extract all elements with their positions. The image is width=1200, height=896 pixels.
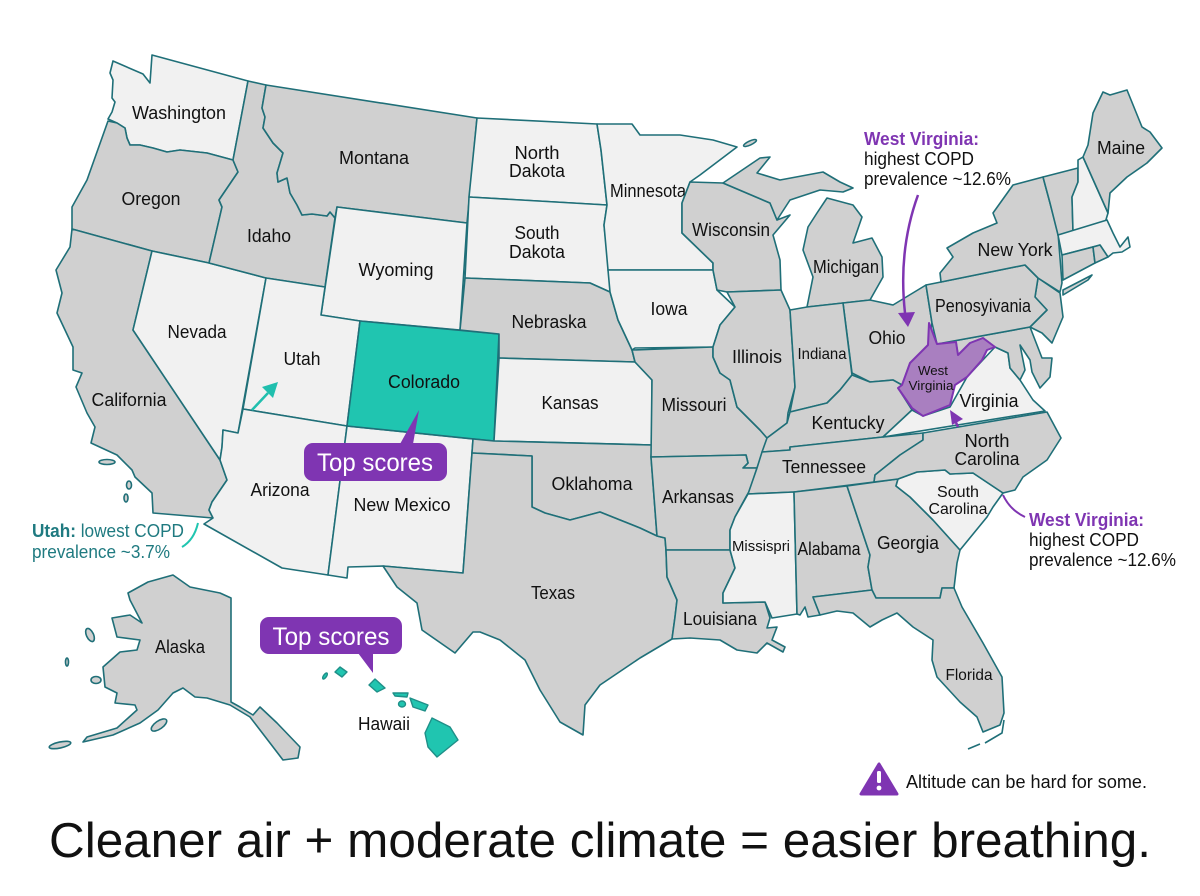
state: Iowa: Iowa (650, 299, 688, 319)
state: Virginia: Virginia (960, 391, 1019, 411)
state: Alaska (49, 575, 300, 760)
state: Tennessee: Tennessee (782, 457, 866, 477)
state: Wisconsin (682, 182, 790, 292)
state: Florida: Florida (946, 667, 993, 684)
state: Arizona: Arizona (250, 480, 310, 500)
state: Michigan: Michigan (813, 257, 879, 277)
state: Utah: Utah (284, 349, 320, 369)
state: Maine (1083, 90, 1162, 213)
state: Oregon: Oregon (122, 189, 180, 209)
state: Florida (813, 588, 1004, 732)
state: Tennessee (748, 433, 923, 494)
state: Kansas: Kansas (542, 393, 598, 413)
state: South Carolina (896, 470, 1003, 550)
state: Utah (243, 278, 360, 426)
state: Mississippi: Missispri (732, 538, 790, 555)
state: New Jersey (1030, 278, 1063, 343)
state: West Virginia: West (918, 363, 948, 378)
callout: Top scores over Hawaii (260, 617, 402, 673)
state: New Mexico (328, 426, 473, 578)
callout: West Virginia highest COPD (top): West Virginia: (864, 129, 979, 149)
state: Indiana (790, 303, 852, 412)
state: Mississippi (723, 492, 797, 618)
arrow: teal pointer in Utah (252, 382, 278, 410)
callout: Utah lowest COPD: prevalence ~3.7% (32, 542, 170, 562)
California islands (99, 460, 132, 502)
state: Minnesota (597, 124, 737, 270)
callout: West Virginia highest COPD (top) (864, 129, 1011, 189)
state: Nevada (133, 251, 266, 460)
callout: West Virginia highest COPD (right): prevalence ~12.6% (1029, 550, 1176, 570)
state: Illinois (713, 290, 795, 438)
state: Colorado (347, 321, 499, 441)
leader line: Utah callout (182, 523, 198, 547)
state: Hawaii: Hawaii (358, 714, 410, 734)
title: Cleaner air + moderate climate = easier breathing. (49, 814, 1151, 868)
state: Alabama: Alabama (798, 539, 861, 559)
state: South Dakota: South (514, 223, 560, 243)
callout: West Virginia highest COPD (right) (1029, 510, 1176, 570)
state: Kentucky (762, 375, 912, 452)
state: Virginia (883, 347, 1045, 437)
state: Oregon (72, 121, 238, 263)
state: South Dakota (465, 197, 610, 292)
state: Montana (262, 85, 477, 223)
state: South Dakota: Dakota (509, 242, 566, 262)
callout: West Virginia highest COPD (top): prevalence ~12.6% (864, 169, 1011, 189)
callout: Top scores over Hawaii: Top scores (272, 623, 390, 651)
state: Maine: Maine (1097, 138, 1145, 158)
state: Connecticut (1062, 247, 1095, 280)
state: Michigan (723, 157, 883, 307)
state: California (56, 229, 227, 518)
state: North Dakota: North (514, 143, 560, 163)
state: Texas (383, 453, 677, 735)
state: Georgia (847, 479, 960, 598)
state: Ohio: Ohio (868, 328, 906, 348)
arrow: to West Virginia (898, 195, 918, 327)
state: Idaho: Idaho (247, 226, 291, 246)
state: New Hampshire (1072, 157, 1108, 232)
state: Texas: Texas (531, 583, 575, 603)
state: Colorado: Colorado (388, 372, 460, 392)
state: Minnesota: Minnesota (610, 181, 687, 201)
state: Massachusetts (1058, 220, 1130, 257)
callout: Top scores over Colorado (304, 410, 447, 481)
state: North Carolina: Carolina (954, 449, 1020, 469)
leader line: right callout (1003, 495, 1025, 517)
state: Alaska: Alaska (155, 637, 206, 657)
map of the United States (49, 55, 1162, 760)
state: New York: New York (978, 240, 1053, 260)
callout: Top scores over Colorado: Top scores (317, 449, 433, 477)
state: Louisiana (666, 550, 785, 653)
state: Pennsylvania: Penosyivania (935, 296, 1032, 316)
state: Wisconsin: Wisconsin (692, 220, 770, 240)
state: West Virginia: Virginia (908, 378, 954, 393)
state: Montana: Montana (339, 148, 410, 168)
callout: West Virginia highest COPD (right): West Virginia: (1029, 510, 1144, 530)
state: Wyoming (321, 207, 467, 330)
state: Arkansas (651, 455, 757, 550)
state: Hawaii (322, 667, 458, 757)
callout: West Virginia highest COPD (right): highest COPD (1029, 530, 1139, 550)
icon: warning triangle (861, 764, 897, 794)
state: Iowa (608, 270, 735, 350)
state: Vermont (1043, 168, 1078, 235)
state: North Carolina: North (964, 431, 1010, 451)
callout: Utah lowest COPD (32, 521, 184, 562)
state: South Carolina: Carolina (928, 501, 988, 518)
Isle Royale (743, 138, 757, 148)
state: North Dakota: Dakota (509, 161, 566, 181)
state: Arkansas: Arkansas (662, 487, 734, 507)
callout: West Virginia highest COPD (top): highest COPD (864, 149, 974, 169)
state: California: California (92, 390, 167, 410)
state: New Mexico: New Mexico (354, 495, 450, 515)
state: Pennsylvania (926, 265, 1047, 344)
state: North Dakota (469, 118, 607, 205)
callout: Utah lowest COPD: Utah: lowest COPD (32, 521, 184, 541)
state: Ohio (843, 285, 932, 385)
state: Louisiana: Louisiana (683, 609, 758, 629)
state: Oklahoma: Oklahoma (552, 474, 633, 494)
state: Illinois: Illinois (732, 347, 782, 367)
state: Washington (108, 55, 248, 160)
state: Wyoming: Wyoming (358, 260, 434, 280)
state: Missouri: Missouri (662, 395, 726, 415)
state: Georgia: Georgia (877, 533, 940, 553)
state: Maryland and Delaware (937, 327, 1052, 388)
state: Missouri (632, 347, 767, 468)
state: North Carolina (874, 412, 1061, 493)
state: South Carolina: South (937, 484, 979, 501)
state: Nebraska: Nebraska (512, 312, 587, 332)
Florida Keys (968, 720, 1004, 749)
state: Nebraska (460, 278, 635, 362)
state: Nevada: Nevada (168, 322, 227, 342)
note: altitude: Altitude can be hard for some. (906, 772, 1147, 792)
state: Indiana: Indiana (798, 346, 847, 363)
state: Alabama (794, 486, 872, 617)
state: West Virginia (898, 323, 995, 416)
state: Washington: Washington (132, 103, 226, 123)
state: Kansas (494, 358, 652, 445)
arrow: small purple pointer (950, 410, 963, 427)
state: Idaho (209, 81, 335, 287)
state: Oklahoma (472, 439, 657, 536)
state: Arizona (204, 409, 347, 575)
state: New York (940, 177, 1062, 292)
Long Island (1063, 275, 1092, 295)
state: Rhode Island (1093, 245, 1108, 263)
state: Kentucky: Kentucky (812, 413, 884, 433)
